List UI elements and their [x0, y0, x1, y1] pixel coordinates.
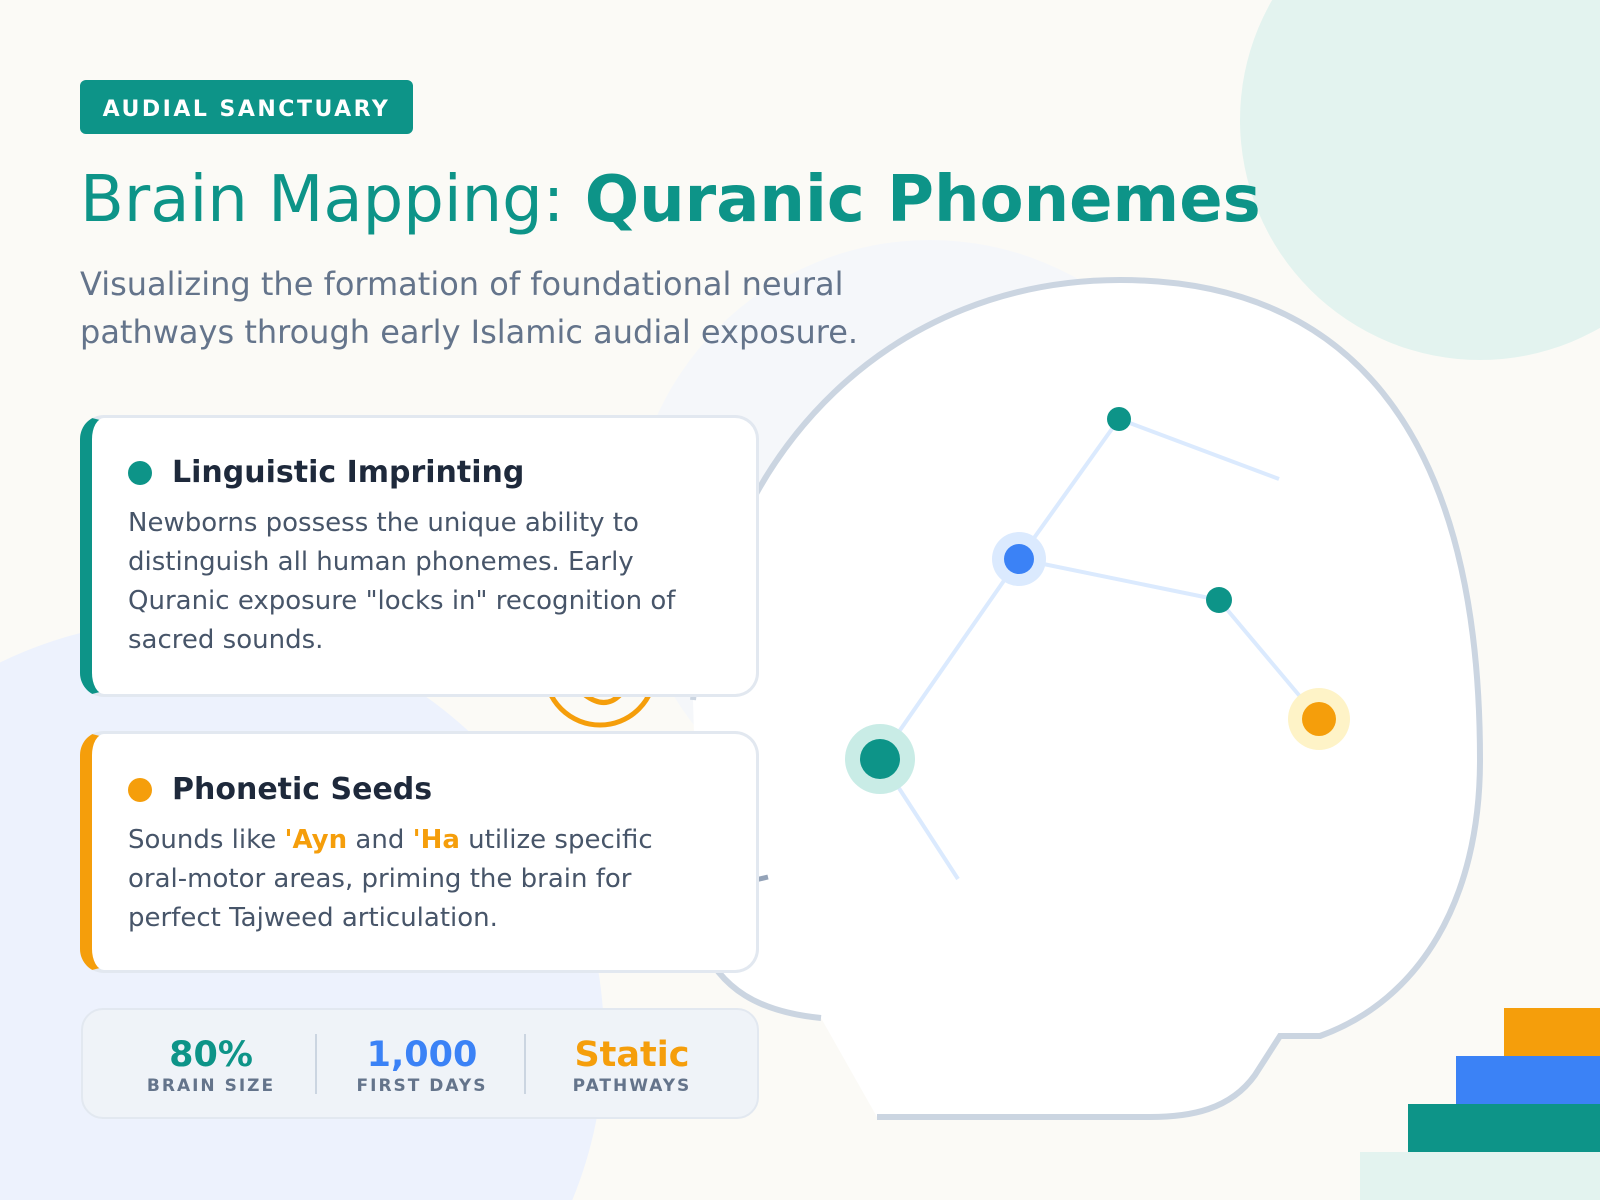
ear swirl	[545, 615, 780, 740]
stat: first days: FIRST DAYS	[356, 1076, 487, 1096]
subtitle: Visualizing the formation of foundational neural	[80, 265, 843, 303]
body text: Newborns possess the unique ability to	[128, 508, 639, 538]
stat: brain size: BRAIN SIZE	[147, 1076, 275, 1096]
body text: sacred sounds.	[128, 625, 323, 655]
stat: first days: 1,000	[367, 1035, 477, 1075]
badge: AUDIAL SANCTUARY	[103, 97, 390, 122]
stats bar	[81, 1008, 759, 1119]
body text	[128, 825, 653, 933]
body text: perfect Tajweed articulation.	[128, 903, 498, 933]
heading: Phonetic Seeds	[172, 772, 432, 807]
stat: pathways: Static	[574, 1035, 690, 1075]
body text: Sounds like 'Ayn and 'Ha utilize specific	[128, 825, 653, 855]
stat: brain size: 80%	[169, 1035, 253, 1075]
body text: Quranic exposure "locks in" recognition of	[128, 586, 675, 616]
stat: pathways: PATHWAYS	[573, 1076, 691, 1096]
title: Brain Mapping: Quranic Phonemes	[80, 163, 1261, 237]
stat: brain size	[147, 1035, 275, 1096]
badge	[80, 80, 413, 134]
dot orange	[128, 778, 152, 802]
subtitle: pathways through early Islamic audial exposure.	[80, 313, 858, 351]
heading: Linguistic Imprinting	[172, 455, 524, 490]
dot teal	[128, 461, 152, 485]
nodes	[845, 407, 1350, 794]
body text: oral-motor areas, priming the brain for	[128, 864, 631, 894]
decorative steps	[1504, 1008, 1600, 1056]
subtitle	[80, 265, 858, 351]
head outline	[693, 280, 1480, 1117]
body text: distinguish all human phonemes. Early	[128, 547, 634, 577]
stat: first days	[356, 1035, 487, 1096]
panel: linguistic imprinting	[80, 415, 759, 697]
body text	[128, 508, 676, 655]
neural network	[880, 419, 1319, 879]
panel: phonetic seeds	[80, 731, 759, 973]
stat: pathways	[573, 1035, 691, 1096]
